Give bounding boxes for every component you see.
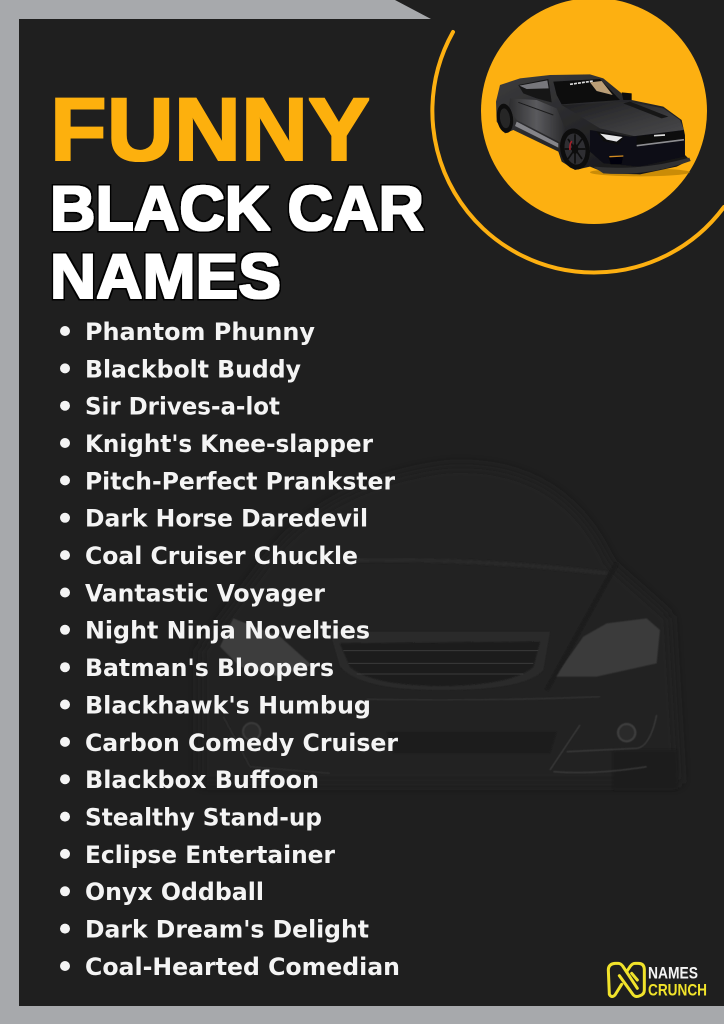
list item: Phantom Phunny [85, 318, 315, 346]
list item: Dark Dream's Delight [85, 916, 369, 944]
list item: Blackbolt Buddy [85, 355, 301, 383]
list item: Night Ninja Novelties [85, 617, 370, 645]
list item: Carbon Comedy Cruiser [85, 729, 398, 757]
list item: Blackhawk's Humbug [85, 691, 371, 719]
list item: Stealthy Stand-up [85, 804, 322, 832]
list item: Blackbox Buffoon [85, 766, 319, 794]
list item: Batman's Bloopers [85, 654, 334, 682]
icon: black sports car [495, 74, 691, 176]
list item: Vantastic Voyager [85, 579, 325, 607]
logo word: NAMES: NAMES [648, 964, 698, 982]
title line: FUNNY: FUNNY [50, 79, 370, 179]
title line: BLACK CAR: BLACK CAR [50, 174, 424, 244]
list item: Sir Drives-a-lot [85, 393, 280, 421]
logo: Names Crunch [608, 963, 707, 1000]
list item: Coal Cruiser Chuckle [85, 542, 358, 570]
list item: Knight's Knee-slapper [85, 430, 373, 458]
logo word: CRUNCH: CRUNCH [648, 982, 707, 1000]
list item: Onyx Oddball [85, 878, 264, 906]
list item: Eclipse Entertainer [85, 841, 335, 869]
faded background car illustration [200, 466, 680, 790]
orange thin ring [432, 32, 724, 273]
title [50, 79, 424, 312]
title line: NAMES: NAMES [50, 242, 281, 312]
list of funny black car names [60, 318, 400, 981]
list item: Pitch-Perfect Prankster [85, 467, 395, 495]
orange circle [481, 0, 707, 224]
list item: Coal-Hearted Comedian [85, 953, 400, 981]
list item: Dark Horse Daredevil [85, 505, 368, 533]
icon: N logo mark [608, 963, 644, 997]
